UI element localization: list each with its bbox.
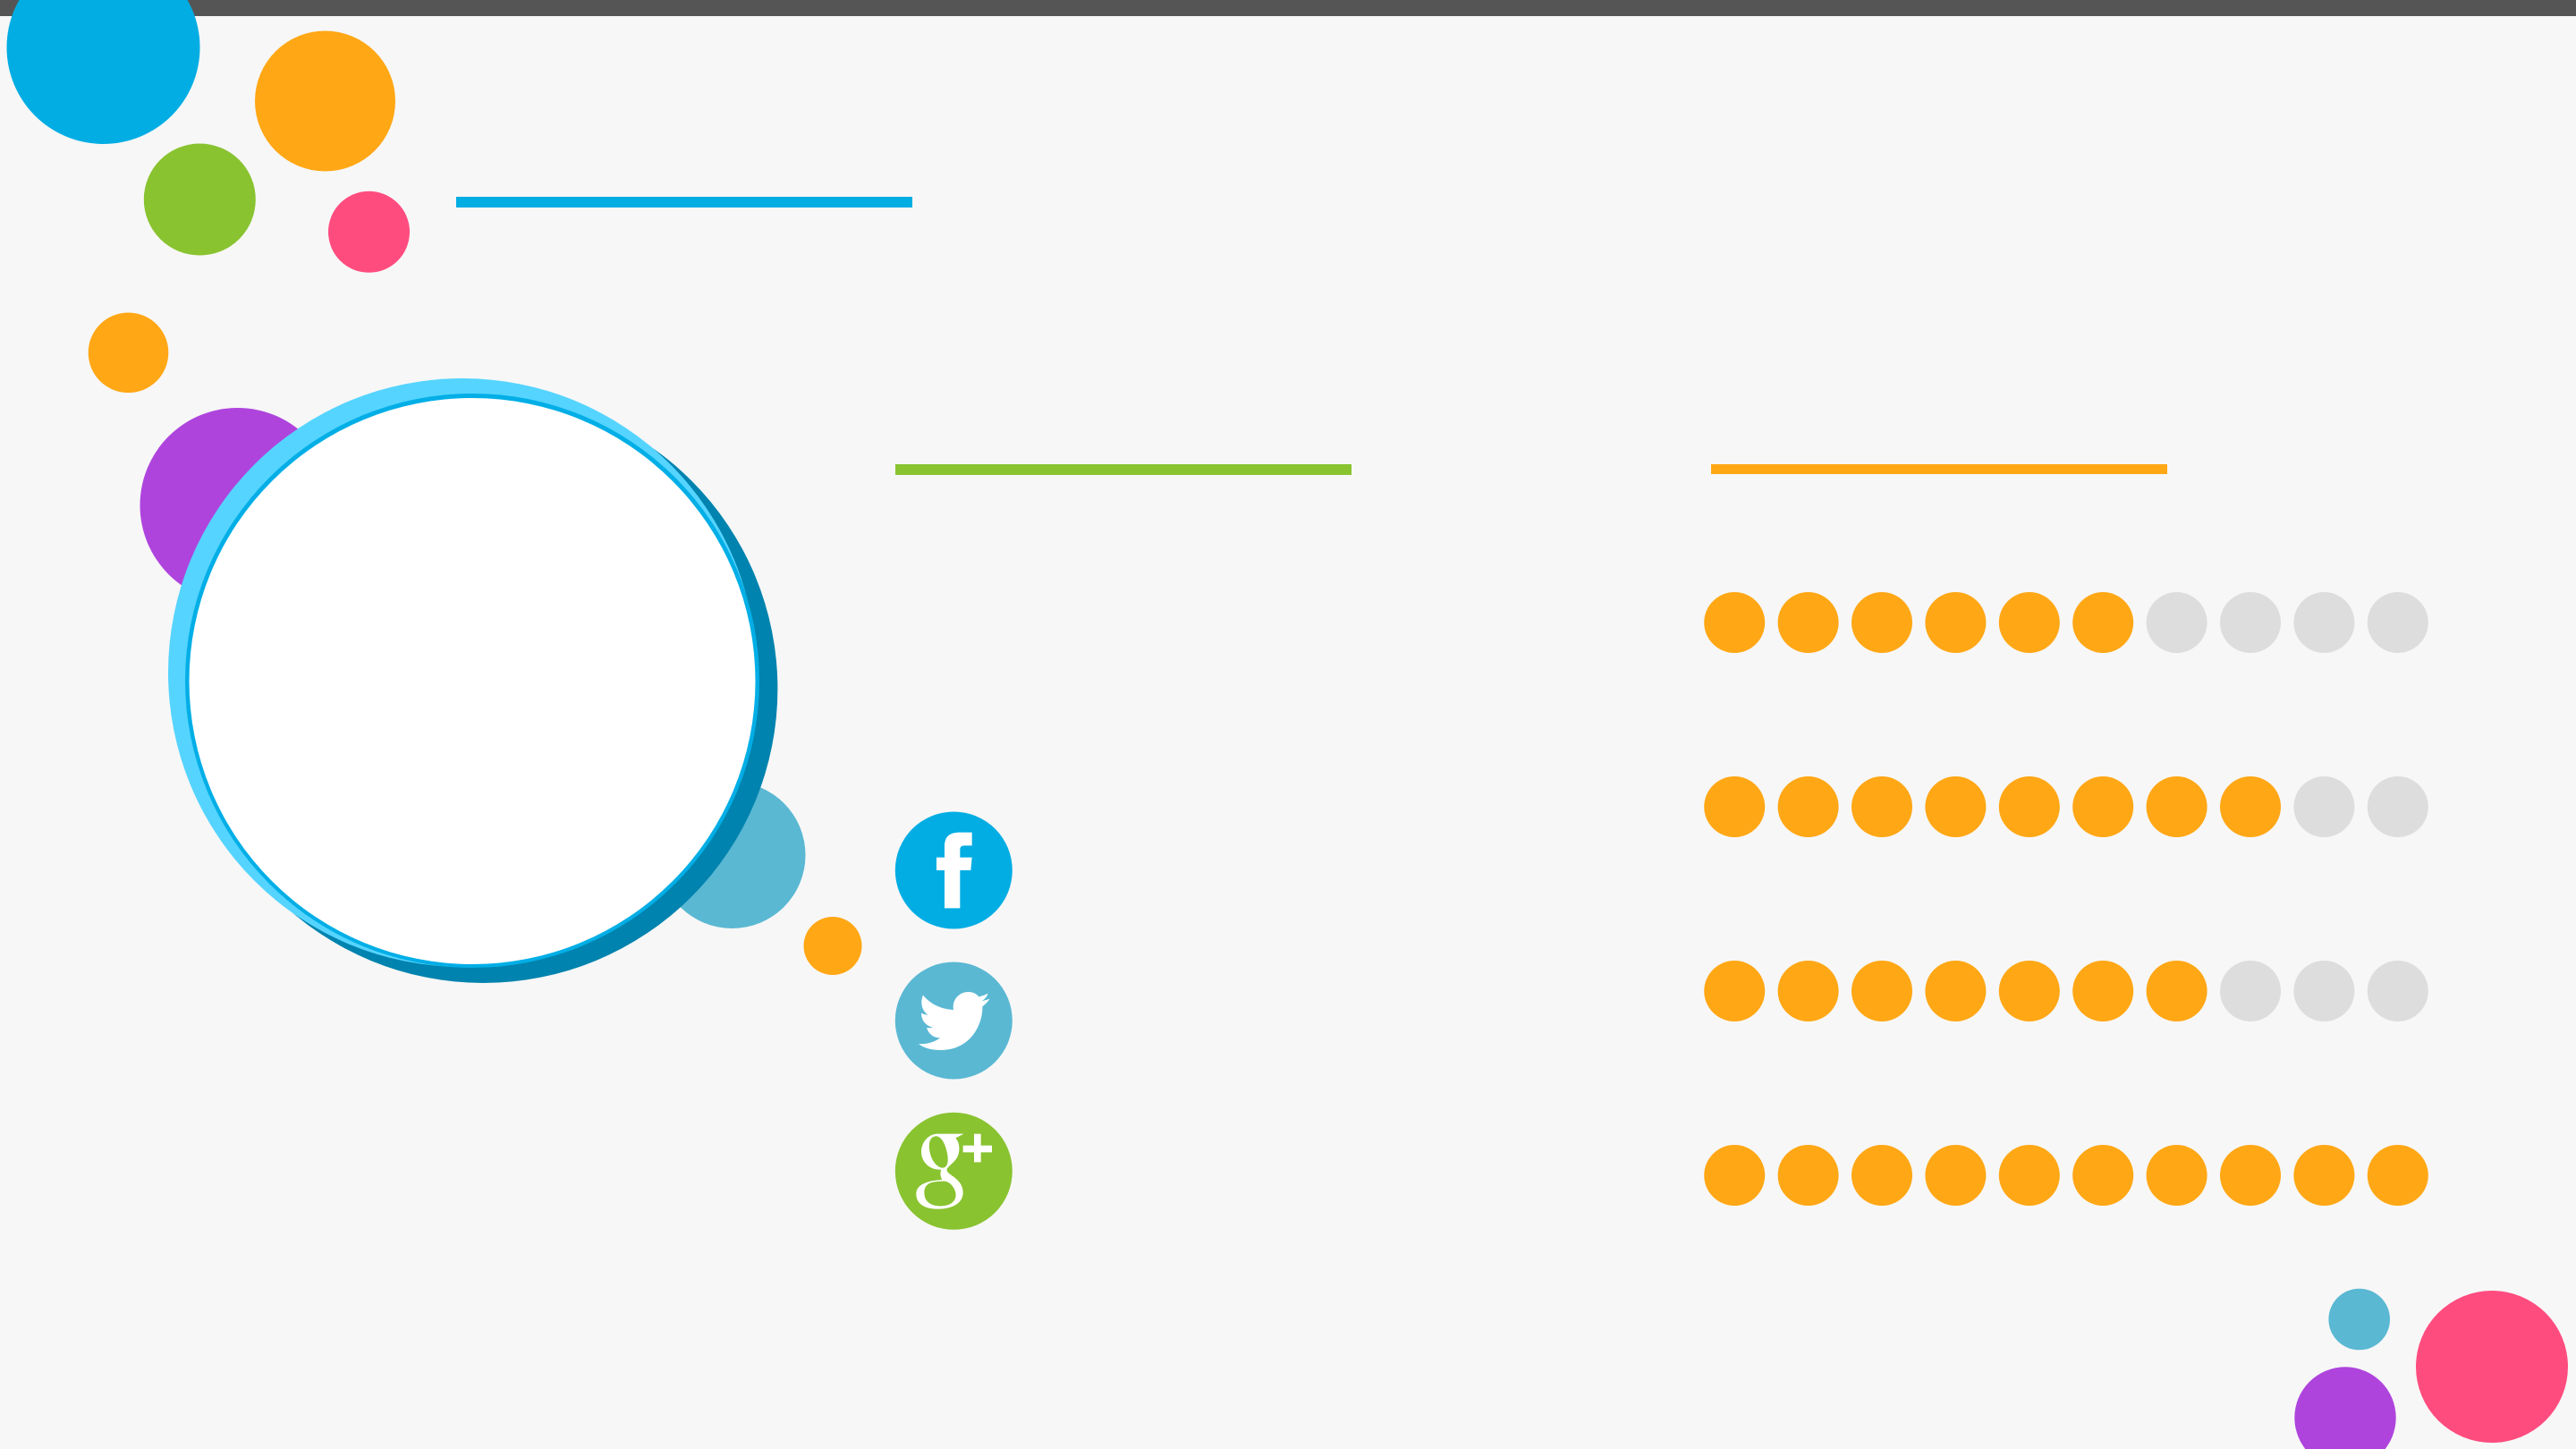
portrait placeholder: white: [190, 398, 755, 964]
circle: pink: [328, 191, 410, 273]
icon: facebook: [895, 812, 1013, 928]
circle: orange large: [255, 30, 395, 172]
heading rule: blue: [456, 197, 912, 208]
top bar: [0, 0, 2576, 16]
circle: orange accent: [803, 917, 862, 975]
circle: blue: [7, 0, 200, 144]
decorative circles: bottom right cluster: [2294, 1289, 2568, 1449]
social icons: [895, 812, 1013, 1230]
ring: blue outline: [185, 394, 759, 968]
rating dots: row 2, 8 of 10: [1704, 776, 2428, 837]
circle: pink large: [2416, 1291, 2568, 1443]
circle: purple: [2294, 1367, 2396, 1449]
rating dots: row 4, 10 of 10: [1704, 1145, 2428, 1206]
circle: teal: [2328, 1289, 2390, 1350]
circle: purple behind portrait: [140, 408, 335, 603]
circle: teal behind portrait: [658, 782, 805, 928]
decorative circles: top left cluster: [7, 0, 410, 393]
icon: twitter: [895, 962, 1013, 1079]
ring: light blue offset: [168, 378, 757, 967]
circle: orange small: [89, 313, 168, 393]
rating dots: row 3, 7 of 10: [1704, 961, 2428, 1021]
ring: dark blue offset: [189, 394, 777, 983]
circle: green: [144, 143, 256, 256]
icon: google plus: [895, 1113, 1013, 1230]
heading rule: green: [895, 464, 1352, 475]
portrait circle group: [140, 378, 805, 983]
rating dots: row 1, 6 of 10: [1704, 592, 2428, 653]
heading rule: orange: [1711, 464, 2167, 474]
